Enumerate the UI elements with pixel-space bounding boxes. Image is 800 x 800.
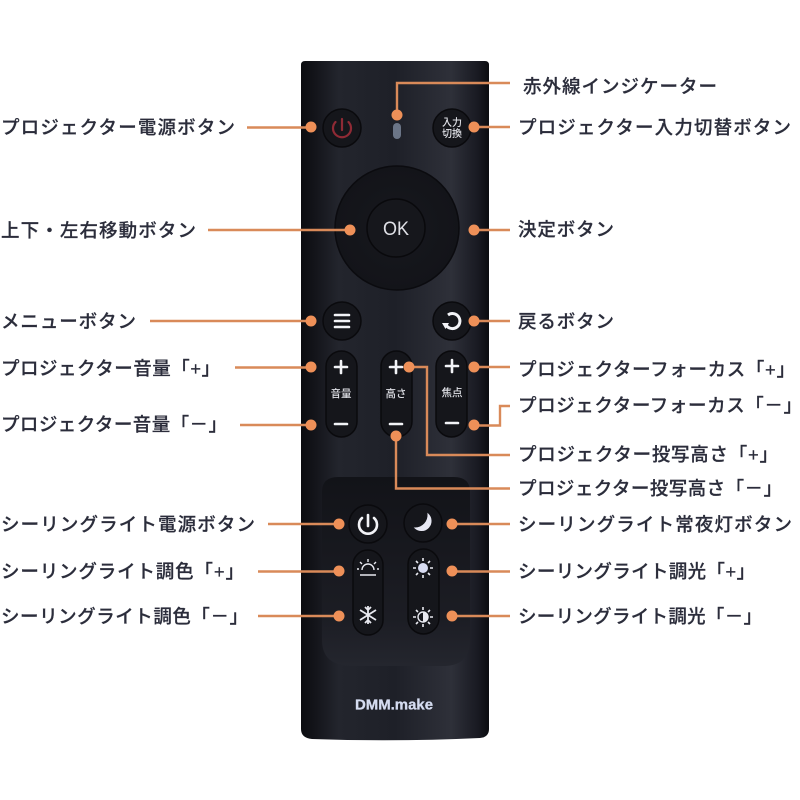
- callout: colour minus: シーリングライト調色「－」: [1, 606, 248, 627]
- projector volume rocker: [326, 351, 357, 437]
- callout: volume plus: プロジェクター音量「+」: [1, 358, 220, 379]
- callout: height plus: [404, 362, 778, 465]
- callout: brightness plus: シーリングライト調光「+」: [518, 561, 755, 582]
- callout: back: 戻るボタン: [518, 311, 614, 332]
- input switch button: [433, 109, 471, 147]
- directional pad: [335, 166, 459, 290]
- callout: projector power: プロジェクター電源ボタン: [1, 117, 235, 138]
- projection height rocker: 高さ: [386, 387, 406, 400]
- callout: focus plus: プロジェクターフォーカス「+」: [518, 359, 795, 380]
- colour tone rocker: [353, 550, 383, 635]
- callout: focus minus: プロジェクターフォーカス「－」: [518, 395, 800, 416]
- night light button: [404, 504, 442, 542]
- projector power button: [323, 109, 361, 147]
- callout: height minus: プロジェクター投写高さ「－」: [518, 478, 782, 499]
- projector focus rocker: 焦点: [442, 386, 463, 399]
- callout: menu: [1, 311, 316, 332]
- callout: infrared indicator: 赤外線インジケーター: [523, 76, 717, 97]
- callout: height minus: [390, 430, 782, 499]
- input switch button: 切換: [442, 127, 462, 140]
- right callouts: [390, 76, 800, 627]
- callout: confirm: [468, 219, 614, 240]
- ceiling light panel: [322, 477, 470, 666]
- callout: ceiling light power: シーリングライト電源ボタン: [1, 514, 255, 535]
- callout: volume minus: プロジェクター音量「－」: [1, 414, 227, 435]
- callout: infrared indicator: [392, 76, 717, 120]
- callout: night light: シーリングライト常夜灯ボタン: [518, 514, 792, 535]
- ceiling light power button: [349, 505, 387, 543]
- DMM.make logo: DMM.make: [355, 696, 433, 714]
- callout: menu: メニューボタン: [1, 311, 136, 332]
- input switch button: 入力: [442, 116, 462, 129]
- projector volume rocker: 音量: [330, 387, 352, 400]
- callout: volume plus: [1, 358, 316, 379]
- callout: confirm: 決定ボタン: [518, 219, 614, 240]
- callout: directional buttons: [1, 220, 356, 241]
- OK button: [367, 199, 425, 257]
- projection height rocker: [381, 351, 412, 437]
- remote body: [301, 61, 489, 740]
- callout: back: [468, 311, 614, 332]
- callout: input switch: プロジェクター入力切替ボタン: [518, 117, 791, 138]
- callout: height plus: プロジェクター投写高さ「+」: [518, 444, 778, 465]
- projector focus rocker: [436, 351, 467, 437]
- brightness rocker: [408, 549, 439, 634]
- callout: focus minus: [468, 395, 800, 430]
- infrared indicator: [393, 123, 401, 139]
- callout: colour plus: シーリングライト調色「+」: [1, 561, 244, 582]
- back button: [433, 302, 471, 340]
- OK button: OK: [383, 219, 409, 240]
- menu button: [323, 302, 361, 340]
- remote control: [301, 61, 489, 740]
- callout: brightness minus: シーリングライト調光「－」: [518, 606, 762, 627]
- left callouts: [1, 117, 356, 627]
- callout: directional buttons: 上下・左右移動ボタン: [1, 220, 196, 241]
